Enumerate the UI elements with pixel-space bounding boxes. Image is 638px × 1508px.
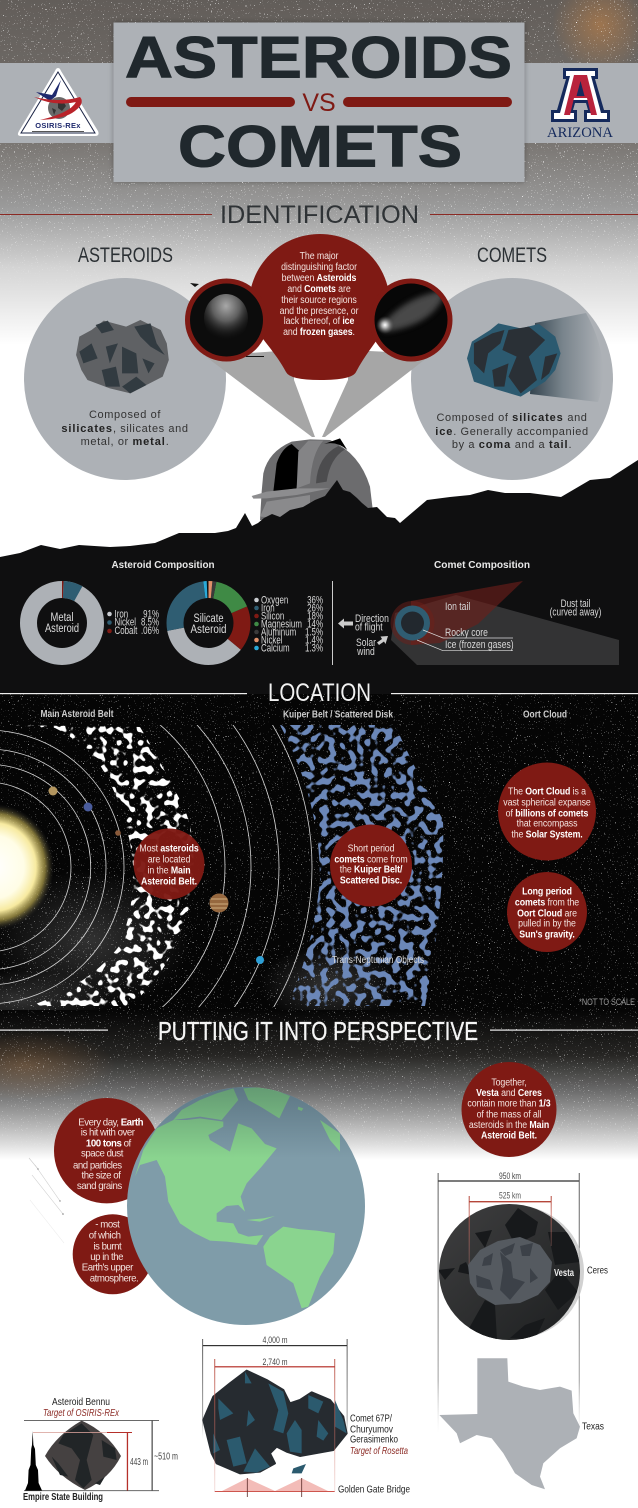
diagram: comet anatomy [390, 581, 619, 665]
callout: main asteroid belt: are located [148, 853, 190, 865]
asteroid belt particles [8, 725, 193, 1006]
text: asteroid description: metal, or metal. [81, 436, 169, 448]
callout: long period comets [507, 872, 587, 952]
label: bennu: Asteroid Bennu [52, 1396, 110, 1408]
callout: oort cloud: the Solar System. [511, 828, 583, 840]
label: bennu: Target of OSIRIS-REx [43, 1407, 120, 1419]
illustration: comet nucleus [203, 1371, 347, 1473]
arrow: solar wind: Solar [356, 637, 377, 649]
title: asteroids: ASTEROIDS [125, 26, 512, 90]
header band [0, 63, 638, 143]
label: asteroids: ASTEROIDS [78, 244, 173, 267]
callout: oort cloud: The Oort Cloud is a [508, 785, 587, 797]
callout: main asteroid belt: in the Main [147, 864, 191, 876]
diagram: comet anatomy: Ice (frozen gases) [445, 639, 514, 651]
legend: silicate asteroid [254, 594, 323, 655]
callout: kuiper belt: Scattered Disc. [340, 874, 402, 886]
background: location star field [0, 694, 638, 1030]
label: main asteroid belt: Main Asteroid Belt [40, 709, 114, 720]
donut chart: metal asteroid: Metal [50, 612, 74, 624]
dimension: 525 km: 525 km [499, 1190, 521, 1200]
comparison: asteroid bennu [23, 1396, 178, 1503]
callout: vesta and ceres: Vesta and Ceres [476, 1086, 542, 1098]
callout: major distinguishing factor: The major [300, 249, 338, 261]
label: comet 67P [350, 1412, 408, 1457]
text: comet description [435, 412, 589, 451]
legend: metal asteroid: 91% [143, 608, 159, 621]
legend: metal asteroid [107, 608, 159, 637]
callout: burnt up in atmosphere: of which [89, 1230, 121, 1241]
meteor streaks [29, 1158, 64, 1243]
mountains and dark section [0, 460, 638, 695]
callout: vesta and ceres [462, 1062, 556, 1157]
label: empire state building: Empire State Building [23, 1492, 103, 1503]
title: comets: COMETS [178, 114, 462, 180]
legend: silicate asteroid: 26% [307, 602, 323, 615]
logo: OSIRIS-REx [18, 68, 99, 136]
callout: major distinguishing factor: and the presence, or [280, 304, 358, 316]
legend: metal asteroid: Cobalt [114, 625, 138, 637]
callout: earth dust: and particles [73, 1160, 122, 1171]
callout: kuiper belt [330, 824, 412, 906]
legend: silicate asteroid: 1.3% [305, 642, 323, 655]
logo: University of Arizona [547, 68, 613, 141]
diagram: comet anatomy: Dust tail [561, 598, 590, 610]
callout: earth dust: Every day, Earth [78, 1117, 144, 1128]
callout: major distinguishing factor: distinguishing factor [281, 260, 357, 272]
donut chart: silicate asteroid: Asteroid [190, 624, 226, 636]
legend: silicate asteroid: 1.4% [305, 634, 323, 647]
heading: location: LOCATION [268, 679, 371, 707]
label: vesta: Vesta [554, 1267, 574, 1279]
label: comet 67P: Churyumov [350, 1424, 394, 1436]
dimension: 443 m: 443 m [130, 1457, 148, 1468]
chart heading: asteroid composition: Asteroid Composition [112, 559, 214, 571]
sun [0, 804, 54, 930]
legend: silicate asteroid: Oxygen [261, 594, 288, 607]
photo: comet image [370, 278, 452, 362]
text: comet description: ice. Generally accompanied [435, 426, 589, 438]
callout: long period comets: pulled in by the [518, 917, 576, 929]
callout: earth dust [54, 1098, 159, 1203]
callout: long period comets: Oort Cloud are [517, 907, 577, 919]
comet tail [530, 313, 603, 402]
arrow: direction of flight [338, 613, 389, 634]
dimension: 4000 m: 4,000 m [262, 1335, 288, 1345]
callout: earth dust: is hit with over [81, 1128, 136, 1139]
callout: long period comets: Long period [522, 885, 572, 897]
illustration: texas [439, 1358, 580, 1489]
illustration: ceres [438, 1204, 584, 1340]
legend: metal asteroid: .06% [141, 625, 159, 637]
callout: burnt up in atmosphere: up in the [90, 1252, 123, 1263]
legend: metal asteroid: 8.5% [141, 616, 159, 629]
callout: oort cloud [498, 762, 596, 860]
callout: vesta and ceres: of the mass of all [477, 1108, 541, 1120]
legend: silicate asteroid: Silicon [261, 610, 284, 623]
callout: major distinguishing factor: and Comets are [287, 282, 351, 294]
vs divider [126, 89, 512, 117]
diagram: comet anatomy: (curved away) [550, 606, 601, 619]
label: golden gate bridge: Golden Gate Bridge [338, 1484, 410, 1496]
arrow: direction of flight: Direction [355, 613, 389, 625]
orbits [0, 725, 312, 1007]
dimension: 443 m [33, 1432, 148, 1490]
callout: vesta and ceres: asteroids in the Main [469, 1118, 549, 1130]
legend: silicate asteroid: 36% [307, 594, 323, 607]
label: comet 67P: Comet 67P/ [350, 1412, 392, 1424]
callout: vesta and ceres: Together, [491, 1076, 527, 1088]
callout: burnt up in atmosphere: - most [95, 1219, 120, 1230]
callout: main asteroid belt [134, 828, 204, 900]
legend: silicate asteroid: Magnesium [261, 618, 302, 631]
photo: asteroid radar image [185, 278, 268, 362]
callout: main asteroid belt: Most asteroids [139, 842, 199, 854]
arrow: solar wind: wind [356, 646, 375, 658]
callout: kuiper belt: Short period [348, 842, 394, 854]
label: comet 67P: Gerasimenko [350, 1434, 398, 1446]
illustration: bennu asteroid [45, 1421, 121, 1490]
panel: comet description [411, 278, 613, 480]
heading: identification: IDENTIFICATION [220, 201, 419, 229]
ion tail [411, 581, 523, 645]
title panel [114, 22, 524, 182]
illustration: vesta [468, 1237, 552, 1305]
callout: burnt up in atmosphere: Earth's upper [82, 1262, 134, 1273]
callout: major distinguishing factor: between Asteroids [282, 271, 356, 283]
dimension: 525 km [469, 1190, 552, 1266]
donut chart: silicate asteroid [175, 590, 242, 656]
diagram: comet anatomy: Rocky core [445, 627, 488, 639]
kuiper belt particles [280, 725, 443, 1006]
label: bennu [43, 1396, 120, 1419]
illustration: observatory dome [252, 438, 374, 520]
diagram: comet anatomy: Ion tail [445, 601, 470, 613]
dimension: 2740 m: 2,740 m [262, 1357, 288, 1367]
callout: oort cloud: that encompass [517, 817, 578, 829]
vs divider: VS [302, 89, 336, 117]
arrow: solar wind [356, 636, 388, 658]
donut chart: silicate asteroid: Silicate [194, 613, 224, 625]
callout: burnt up in atmosphere [73, 1214, 153, 1294]
callout: main asteroid belt: Asteroid Belt. [141, 875, 197, 887]
logo: OSIRIS-REx: OSIRIS-REx [35, 121, 81, 130]
callout: earth dust: 100 tons of [86, 1138, 131, 1149]
donut chart: metal asteroid [28, 590, 96, 656]
label: comets: COMETS [477, 244, 547, 267]
text: asteroid description [61, 409, 189, 448]
heading: putting it into perspective: PUTTING IT INTO PERSPECTIVE [158, 1016, 478, 1046]
dimension: 2740 m [214, 1357, 335, 1491]
text: asteroid description: Composed of [89, 409, 161, 421]
legend: metal asteroid: Nickel [114, 616, 136, 629]
label: trans-neptunian objects: Trans-Neptunian Objects [332, 954, 424, 966]
background: perspective gradient [0, 1010, 638, 1160]
icon: empire state building [25, 1431, 42, 1490]
planets [48, 786, 264, 964]
chart heading: comet composition: Comet Composition [434, 559, 530, 571]
telescope beams [205, 350, 432, 437]
panel: asteroid description [24, 278, 226, 480]
callout: vesta and ceres: Asteroid Belt. [481, 1129, 537, 1141]
legend: silicate asteroid: Nickel [261, 634, 283, 647]
callout: burnt up in atmosphere: is burnt [93, 1241, 122, 1252]
legend: silicate asteroid: Iron [261, 602, 275, 615]
legend: silicate asteroid: 14% [307, 618, 323, 631]
callout: major distinguishing factor: lack thereof, of ice [284, 314, 354, 326]
callout: earth dust: the size of [82, 1170, 121, 1181]
illustration: earth globe [127, 1087, 365, 1325]
comparison: comet 67P [202, 1335, 410, 1497]
icon: asteroid [76, 320, 169, 393]
donut chart: metal asteroid: Asteroid [45, 623, 79, 635]
callout: earth dust: space dust [81, 1149, 124, 1160]
dimension: 510 m: ~510 m [154, 1452, 178, 1462]
callout: burnt up in atmosphere: atmosphere. [90, 1273, 138, 1284]
legend: silicate asteroid: Aluminum [261, 626, 296, 639]
legend: silicate asteroid: 18% [307, 610, 323, 623]
legend: metal asteroid: Iron [114, 608, 128, 621]
label: kuiper belt: Kuiper Belt / Scattered Disk [283, 710, 393, 720]
label: comet 67P: Target of Rosetta [350, 1445, 408, 1457]
label: ceres: Ceres [587, 1264, 608, 1276]
dust tail [391, 595, 619, 665]
arrow: direction of flight: of flight [355, 622, 383, 634]
callout: oort cloud: vast spherical expanse [503, 796, 591, 808]
label: texas: Texas [582, 1420, 604, 1432]
callout: earth dust: sand grains [77, 1181, 122, 1192]
text: asteroid description: silicates, silicates and [61, 423, 189, 435]
text: comet description: by a coma and a tail. [452, 439, 572, 451]
label: oort cloud: Oort Cloud [523, 710, 567, 720]
callout: major distinguishing factor: their source regions [281, 293, 357, 305]
callout: long period comets: comets from the [515, 896, 579, 908]
logo: University of Arizona: ARIZONA [547, 125, 613, 141]
icon: comet nucleus [467, 323, 561, 397]
callout: long period comets: Sun's gravity. [519, 928, 575, 940]
illustration: golden gate bridge [215, 1478, 335, 1497]
callout: major distinguishing factor [249, 234, 390, 380]
callout: oort cloud: of billions of comets [506, 807, 588, 819]
legend: silicate asteroid: Calcium [261, 642, 290, 655]
callout: kuiper belt: the Kuiper Belt/ [340, 863, 403, 875]
dimension: 950 km: 950 km [499, 1171, 521, 1181]
text: comet description: Composed of silicates and [436, 412, 588, 424]
legend: silicate asteroid: 1.5% [305, 626, 323, 639]
callout: major distinguishing factor: and frozen gases. [283, 325, 355, 337]
background: starry sky header [0, 0, 638, 345]
callout: vesta and ceres: contain more than 1/3 [467, 1097, 551, 1109]
callout: kuiper belt: comets come from [334, 853, 408, 865]
coma and nucleus [390, 601, 434, 645]
